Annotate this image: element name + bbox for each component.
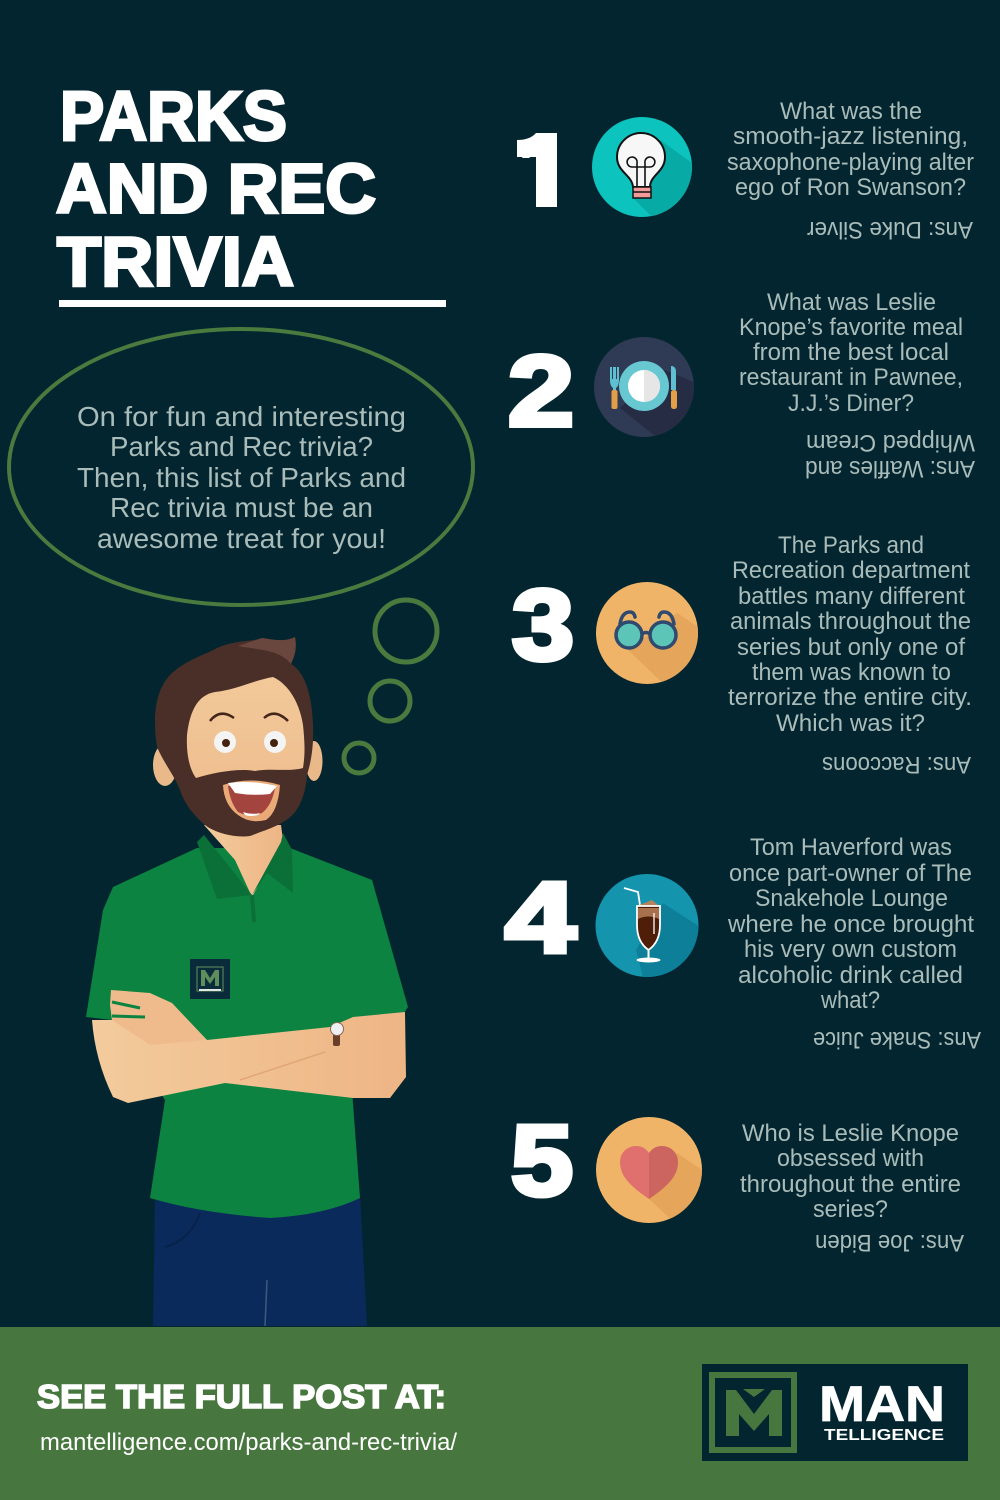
question 1 [727, 98, 974, 201]
title: TRIVIA [57, 222, 294, 300]
title: PARKS [60, 77, 287, 155]
question 1: smooth-jazz listening, [733, 123, 968, 150]
question 3: animals throughout the [730, 608, 971, 635]
answer 5 (upside down): Ans: Joe Biden [815, 1229, 964, 1256]
trousers [153, 1195, 367, 1326]
question 2: Knope’s favorite meal [739, 314, 963, 341]
footer band [0, 1327, 1000, 1500]
question 4: once part-owner of The [729, 860, 972, 887]
shirt [86, 848, 408, 1218]
speech bubble: intro: Parks and Rec trivia? [110, 431, 373, 462]
logo: MAN [819, 1376, 945, 1432]
question 3: The Parks and [778, 532, 924, 559]
shirt badge [190, 959, 230, 999]
number 1 [517, 133, 557, 207]
question 4: alcoholic drink called [738, 962, 963, 989]
speech bubble: intro: Then, this list of Parks and [77, 462, 406, 493]
number 1: 1 [518, 114, 574, 226]
footer heading: SEE THE FULL POST AT: [37, 1378, 446, 1415]
item 5: number, heart icon, question, answer [511, 1117, 964, 1252]
item 1: number, lightbulb icon, question, answer [517, 98, 974, 243]
number 4: 4 [505, 862, 576, 974]
mouth [223, 780, 280, 821]
question 4: his very own custom [744, 936, 957, 963]
question 1: ego of Ron Swanson? [735, 174, 966, 201]
question 2: What was Leslie [767, 289, 936, 316]
icon: milkshake [596, 874, 700, 985]
question 5 [740, 1120, 961, 1223]
question 3: them was known to [752, 659, 951, 686]
title [56, 77, 446, 307]
icon: lightbulb [592, 117, 695, 220]
answer 2 (upside down) [805, 429, 975, 482]
icon: heart [596, 1117, 705, 1225]
logo: TELLIGENCE [824, 1427, 944, 1444]
item 3: number, glasses icon, question, answer [512, 532, 972, 778]
thought bubbles [344, 600, 437, 773]
question 2: J.J.’s Diner? [788, 390, 914, 417]
answer 3 (upside down): Ans: Raccoons [822, 751, 971, 778]
question 3: Which was it? [776, 710, 925, 737]
question 4: Tom Haverford was [750, 834, 952, 861]
question 3: battles many different [738, 583, 965, 610]
speech bubble: intro: awesome treat for you! [97, 523, 386, 554]
hair highlight [238, 637, 296, 664]
question 3: series but only one of [737, 634, 965, 661]
icon: plate and cutlery [594, 337, 700, 440]
eyes [210, 714, 288, 753]
number 5: 5 [511, 1105, 573, 1217]
answer 1 (upside down): Ans: Duke Silver [807, 216, 973, 243]
question 2: from the best local [753, 339, 949, 366]
question 2: restaurant in Pawnee, [739, 364, 963, 391]
answer 4 (upside down): Ans: Snake Juice [813, 1026, 981, 1053]
question 3: Recreation department [732, 557, 970, 584]
title: AND REC [56, 150, 376, 228]
face [187, 677, 304, 778]
question 5: series? [813, 1196, 888, 1223]
question 1: saxophone-playing alter [727, 149, 974, 176]
item 2: number, plate icon, question, answer [508, 289, 975, 482]
question 4: Snakehole Lounge [755, 885, 948, 912]
question 4: what? [820, 987, 880, 1014]
illustration: bearded man with crossed arms [86, 637, 408, 1326]
answer 2 (upside down): Ans: Waffles and [805, 455, 975, 482]
neck [204, 825, 283, 897]
number 2: 2 [508, 336, 574, 448]
question 2 [739, 289, 963, 417]
collar [197, 833, 293, 922]
icon: glasses [596, 582, 700, 690]
speech bubble: intro: On for fun and interesting [77, 401, 406, 432]
item 4: number, drink icon, question, answer [505, 834, 981, 1053]
question 5: obsessed with [777, 1145, 924, 1172]
question 4 [727, 834, 974, 1014]
speech bubble: intro: Rec trivia must be an [110, 492, 373, 523]
question 5: Who is Leslie Knope [742, 1120, 959, 1147]
hair and beard [155, 637, 313, 836]
question 4: where he once brought [727, 911, 974, 938]
speech bubble: intro [9, 329, 473, 605]
question 3 [728, 532, 972, 737]
ears [153, 741, 322, 786]
wristwatch [330, 1022, 344, 1046]
crossed arms [92, 990, 406, 1103]
logo [702, 1364, 968, 1461]
question 3: terrorize the entire city. [728, 684, 972, 711]
footer url: mantelligence.com/parks-and-rec-trivia/ [40, 1429, 457, 1456]
answer 2 (upside down): Whipped Cream [806, 429, 975, 456]
question 5: throughout the entire [740, 1171, 961, 1198]
number 3: 3 [512, 570, 574, 682]
question 1: What was the [780, 98, 922, 125]
